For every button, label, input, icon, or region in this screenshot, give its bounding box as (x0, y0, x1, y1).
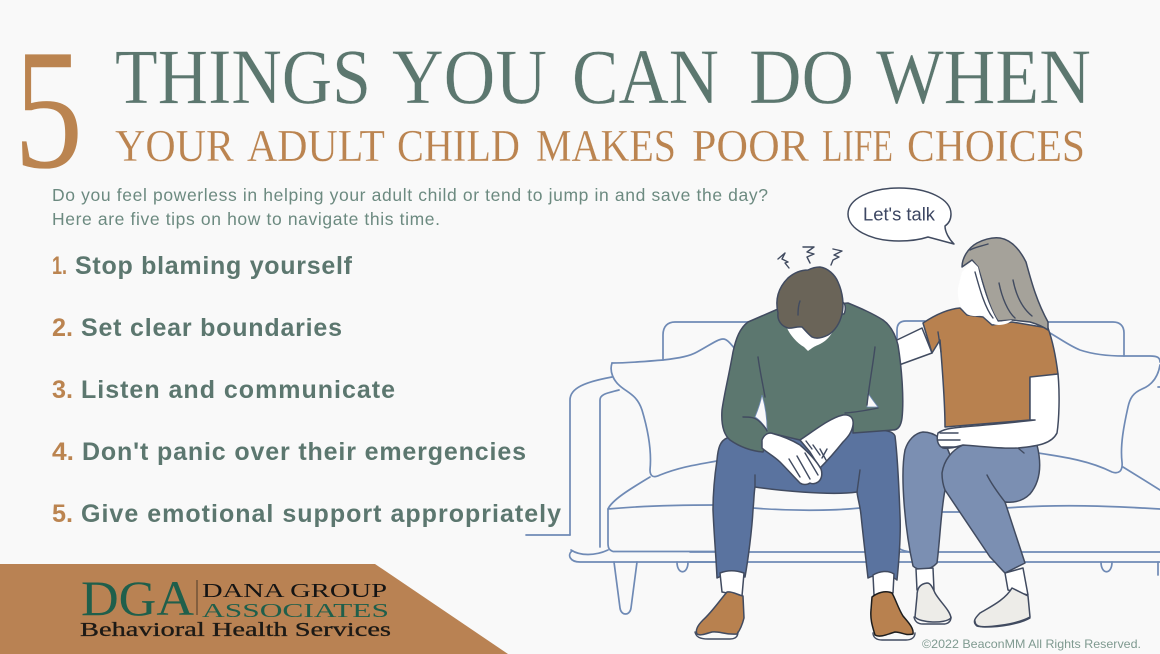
copyright: ©2022 BeaconMM All Rights Reserved. (922, 637, 1141, 651)
speech bubble (848, 188, 954, 244)
tip 1: Stop blaming yourself (75, 252, 353, 280)
illustration: woman (897, 238, 1059, 627)
woman face (958, 261, 1012, 325)
tip 3: 3. (52, 376, 73, 404)
logo (80, 570, 391, 641)
man left hand (762, 433, 822, 484)
numeral 5: 5 (14, 15, 83, 205)
man ear (840, 302, 845, 314)
illustration: man (695, 247, 915, 640)
logo: Behavioral Health Services (80, 619, 391, 641)
title: THINGS (115, 33, 371, 120)
man socks (720, 571, 894, 596)
title: YOU (392, 33, 547, 120)
intro text: Do you feel powerless in helping your adult child or tend to jump in and save the day? (52, 185, 768, 205)
tip 4: 4. (52, 438, 74, 466)
woman far arm (897, 328, 932, 365)
subtitle: CHOICES (907, 121, 1085, 171)
subtitle: POOR (692, 121, 809, 171)
man face (787, 326, 833, 351)
man sweater (722, 303, 903, 452)
man hair (777, 267, 843, 338)
title: CAN (572, 33, 719, 120)
tip 2: Set clear boundaries (81, 314, 342, 342)
subtitle (115, 121, 1085, 171)
speech text: Let's talk (863, 204, 936, 224)
logo: DANA GROUP (202, 580, 387, 602)
illustration: sofa (526, 321, 1160, 614)
tip 5: 5. (52, 500, 73, 528)
subtitle: YOUR (115, 121, 234, 171)
subtitle: CHILD (397, 121, 520, 171)
man left shoe (696, 592, 744, 635)
title (115, 33, 1091, 120)
woman shoes (915, 583, 951, 622)
tip 1: 1. (52, 252, 67, 280)
logo: ASSOCIATES (202, 600, 389, 622)
man arm gaps (755, 393, 878, 430)
woman near leg (942, 445, 1040, 573)
worry squiggles (778, 247, 842, 268)
man right hand (800, 415, 853, 468)
woman shirt (923, 308, 1058, 427)
subtitle: ADULT (247, 121, 385, 171)
subtitle: MAKES (536, 121, 676, 171)
title: WHEN (876, 33, 1091, 120)
woman arm and hand (937, 374, 1059, 448)
tip 3: Listen and communicate (81, 376, 395, 404)
woman far leg (903, 432, 950, 569)
subtitle: LIFE (822, 121, 893, 171)
tip 5: Give emotional support appropriately (81, 500, 561, 528)
footer banner (0, 564, 508, 654)
man jeans (713, 430, 900, 580)
tips list (52, 252, 561, 528)
woman socks (916, 568, 1028, 595)
logo: DGA (81, 570, 194, 626)
intro text: Here are five tips on how to navigate this time. (52, 209, 440, 229)
tip 2: 2. (52, 314, 73, 342)
tip 4: Don't panic over their emergencies (82, 438, 526, 466)
man right shoe (871, 592, 913, 636)
woman hair (962, 238, 1048, 330)
intro text (52, 185, 768, 229)
title: DO (749, 33, 854, 120)
